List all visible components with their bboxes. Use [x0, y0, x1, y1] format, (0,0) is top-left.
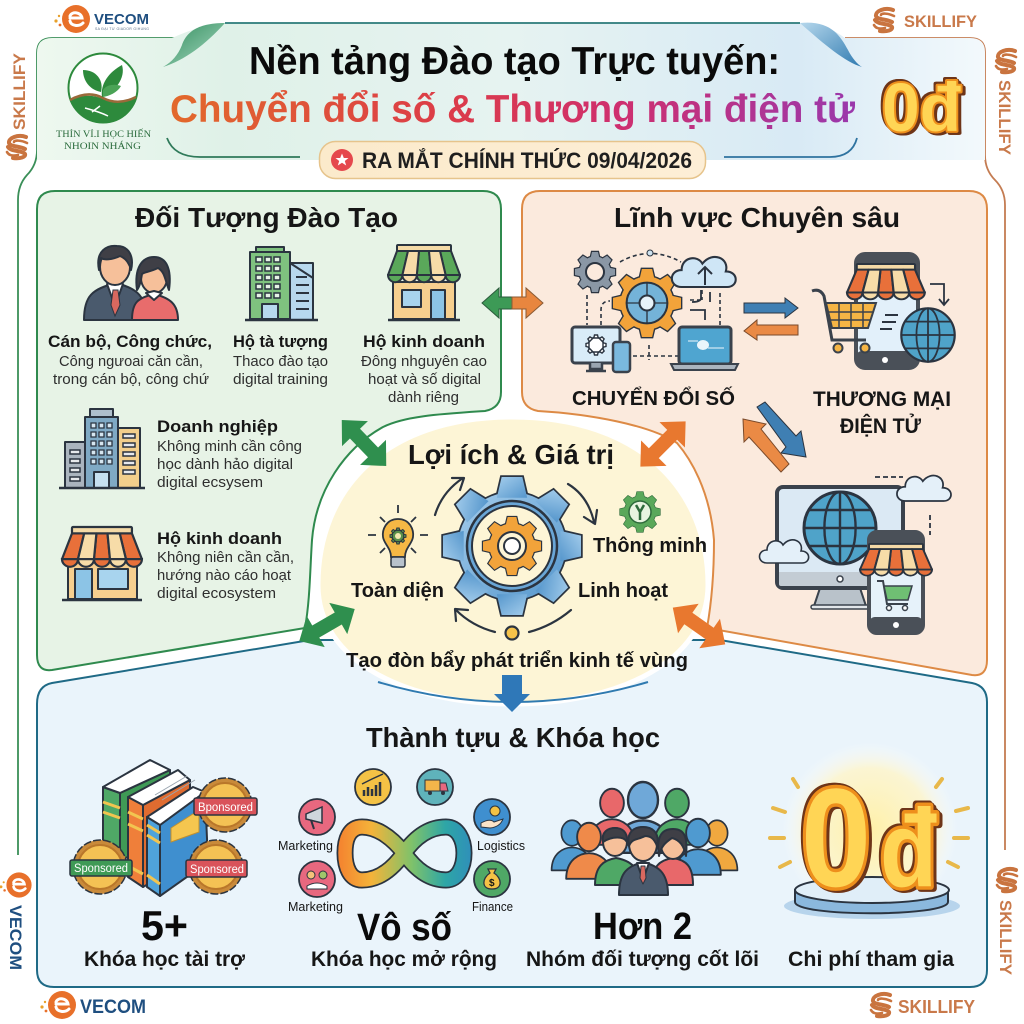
label: digital transformation: CHUYỂN ĐỔI SỐ [572, 386, 735, 410]
stat: extended courses: Vô số [357, 907, 452, 949]
title [170, 40, 856, 131]
text: enterprise: Doanh nghiệp [157, 417, 278, 436]
text: self-employed: digital training [233, 372, 328, 388]
icon: enterprise buildings [59, 409, 145, 488]
icon: growth chart [355, 769, 391, 805]
stat: core groups: Hơn 2 [593, 906, 692, 948]
brand: Skillify left [7, 52, 29, 158]
logo: leaves: NHOIN NHÁNG [64, 141, 142, 151]
brand: Skillify right: SKILLIFY [995, 80, 1014, 156]
icon: green shop [388, 245, 460, 320]
arc under ellipse [378, 682, 648, 702]
icon: digital transformation cluster [572, 250, 738, 372]
text: household business: Hộ kinh doanh [363, 332, 485, 351]
text: enterprise [157, 417, 302, 491]
heading: audiences: Đối Tượng Đào Tạo [135, 202, 398, 233]
text: household business 2: Hộ kinh doanh [157, 529, 282, 548]
brand: Vecom bottom: VECOM [80, 997, 146, 1018]
stat: core groups: Nhóm đối tượng cốt lõi [526, 948, 759, 971]
label: ecommerce [813, 388, 951, 438]
panel: benefits ellipse [318, 417, 708, 704]
text: self-employed: Hộ tà tượng [233, 332, 328, 351]
label: ecommerce: THƯƠNG MẠI [813, 388, 951, 411]
icon: 0đ on pedestal: đ [880, 787, 937, 910]
header ribbon [37, 23, 985, 160]
icon: ecommerce cluster [812, 254, 955, 368]
icon: infinity with topics: Marketing [278, 839, 333, 853]
text: regional leverage: Tạo đòn bẩy phát triển kinh tế vùng [346, 650, 688, 672]
text: household business 2: digital ecosystem [157, 586, 276, 602]
arrow: specialties to achievements [662, 593, 736, 659]
icon: money bag: $ [489, 878, 495, 889]
icon: truck [417, 769, 453, 805]
icon: infinity with topics: Marketing [288, 900, 343, 914]
text: household business 2: hướng nào cáo hoạt [157, 568, 291, 584]
icon: sponsored books: Sponsored [74, 863, 128, 875]
icon: team [299, 861, 335, 897]
text: household business [361, 332, 487, 406]
stat: core groups [526, 906, 759, 971]
icon: officials [84, 246, 178, 320]
brand: Skillify top: SKILLIFY [904, 13, 977, 31]
icon: sponsored books [70, 760, 257, 896]
arrows: diagonal exchange [743, 402, 806, 472]
stat: participation cost: Chi phí tham gia [788, 948, 954, 971]
arrow: audiences to benefits [329, 407, 399, 479]
text: comprehensive: Toàn diện [351, 580, 444, 602]
text: officials: Công ngưoai căn cần, [59, 354, 203, 370]
brand: Vecom top: SA ĐẠI TƯ GIADOR GIHUNG [95, 27, 149, 31]
text: officials [48, 332, 212, 388]
title: Chuyển đổi số & Thương mại điện tử [170, 88, 856, 131]
icon: crowd of learners [552, 782, 737, 895]
icon: web and mobile store [760, 476, 951, 633]
stat: sponsored courses: 5+ [141, 902, 188, 949]
brand: Skillify bottom [871, 994, 975, 1017]
arrow: specialties to benefits [628, 409, 698, 479]
text: household business: Đông nhguyên cao [361, 354, 487, 370]
stat: extended courses [311, 907, 497, 971]
panel: specialties background [522, 191, 987, 675]
0đ badge: 0đ [882, 69, 961, 146]
brand: Skillify left: SKILLIFY [10, 52, 29, 130]
stat: sponsored courses: Khóa học tài trợ [84, 948, 245, 971]
text: smart: Thông minh [593, 535, 707, 557]
launch date pill: RA MẮT CHÍNH THỨC 09/04/2026 [362, 148, 692, 173]
arrow: audiences to specialties [482, 288, 543, 318]
label: ecommerce: ĐIỆN TỬ [840, 414, 922, 438]
text: enterprise: Không minh cần công [157, 439, 302, 455]
icon: sponsored books: Sponsored [190, 864, 244, 876]
icon: 0đ on pedestal: 0 [801, 759, 871, 916]
icon: light bulb [368, 505, 428, 567]
brand: Vecom top [54, 5, 149, 33]
text: enterprise: digital ecsysem [157, 475, 263, 491]
logo: leaves: THỈN VỈ.I HỌC HIẾN [56, 129, 152, 139]
icon: central gear [443, 477, 581, 615]
arrow: benefits to achievements [494, 675, 530, 712]
text: enterprise: học dành hảo digital [157, 457, 293, 473]
brand: Skillify right [995, 50, 1016, 156]
heading: specialties: Lĩnh vực Chuyên sâu [614, 202, 900, 233]
icon: sponsored books: Bponsored [198, 802, 253, 814]
text: household business 2: Không niên cần cần, [157, 550, 294, 566]
text: household business: hoạt và số digital [368, 372, 481, 388]
brand: Vecom bottom [40, 991, 146, 1019]
icon: wrench gear [620, 492, 660, 532]
icon: green building [245, 247, 318, 320]
text: self-employed: Thaco đào tạo [233, 354, 328, 370]
launch date pill [320, 142, 706, 178]
icon: finance hand [474, 799, 510, 835]
icon: money bag [474, 861, 510, 897]
arrows: digital to ecommerce [744, 298, 798, 340]
text: household business: dành riêng [388, 390, 459, 406]
stat: extended courses: Khóa học mở rộng [311, 948, 497, 971]
text: officials: Cán bộ, Công chức, [48, 332, 212, 351]
brand: Skillify lower right: SKILLIFY [996, 900, 1015, 976]
text: self-employed [233, 332, 328, 388]
arrows: benefit cycle [435, 478, 597, 640]
text: officials: trong cán bộ, công chứ [53, 372, 209, 388]
brand: Vecom top: VECOM [94, 11, 149, 28]
heading: achievements: Thành tựu & Khóa học [366, 722, 660, 753]
brand: Skillify top [874, 9, 977, 31]
brand: Skillify bottom: SKILLIFY [898, 997, 975, 1017]
icon: 0đ on pedestal [770, 742, 968, 919]
panel: achievements background [37, 640, 987, 987]
stat: sponsored courses [84, 902, 245, 971]
icon: orange shop [62, 527, 142, 600]
title: Nền tảng Đào tạo Trực tuyến: [249, 40, 780, 83]
panel: audiences background [37, 191, 501, 670]
icon: infinity with topics [278, 769, 525, 914]
brand: Vecom left: VECOM [6, 905, 25, 970]
heading: benefits: Lợi ích & Giá trị [408, 439, 614, 470]
text: household business 2 [157, 529, 294, 602]
text: flexible: Linh hoạt [578, 580, 668, 602]
brand: Skillify lower right [996, 869, 1017, 976]
brand: Vecom left [0, 872, 32, 970]
icon: infinity with topics: Logistics [477, 839, 525, 853]
icon: infinity with topics: Finance [472, 900, 513, 914]
arrow: audiences to achievements [290, 593, 364, 657]
icon: megaphone [299, 799, 335, 835]
logo: leaves [56, 54, 152, 151]
